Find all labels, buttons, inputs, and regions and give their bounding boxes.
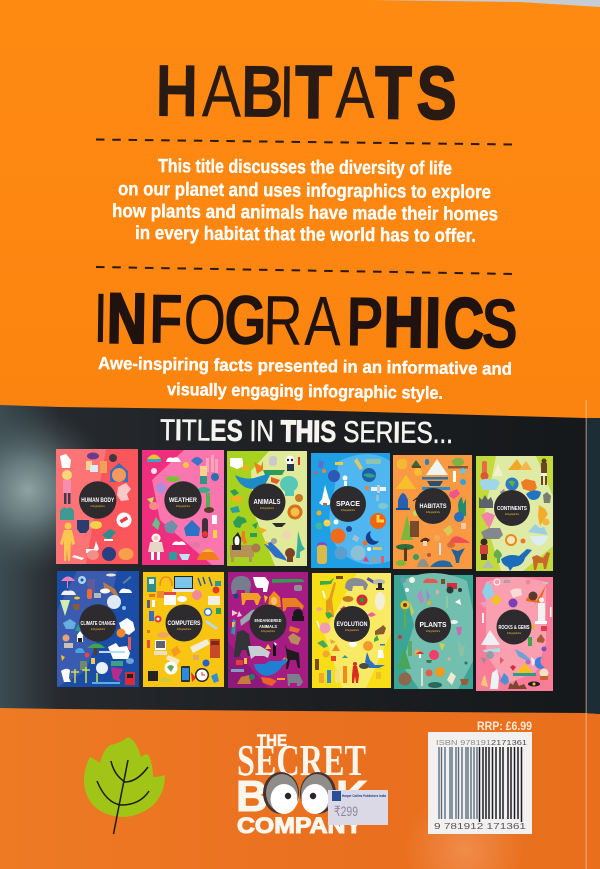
title: Habitats: T (295, 51, 332, 134)
logo: The Secret Book Company: SECRET (237, 736, 366, 785)
text block: description: how plants and animals have made their homes (112, 201, 498, 225)
book cover: Evolution: EVOLUTION (336, 621, 368, 628)
book cover: Endangered Animals: Infographics (261, 629, 276, 633)
title: Infographics: A (304, 282, 342, 361)
panel: upper orange cover (0, 0, 600, 425)
book cover: Weather: Infographics (176, 504, 191, 508)
book cover: Rocks and Gems (476, 577, 553, 691)
book cover: Habitats: Infographics (426, 510, 441, 514)
book cover: Endangered Animals: ENDANGERED (254, 618, 282, 624)
book cover: Computers: Infographics (177, 627, 192, 631)
title: Habitats: A (201, 50, 242, 133)
book cover: Computers: COMPUTERS (168, 620, 201, 627)
title: Infographics: R (263, 282, 303, 360)
title: Habitats: T (375, 52, 412, 135)
book cover: Plants: PLANTS (420, 620, 446, 629)
text block: description: This title discusses the diversity of life (158, 156, 452, 180)
barcode (428, 732, 532, 834)
title: Infographics: P (346, 283, 384, 362)
book cover: Space: SPACE (336, 499, 360, 508)
price sticker: Harper Collins Publishers India (342, 794, 387, 798)
panel: dark series band (0, 400, 600, 869)
book cover: Climate Change (57, 571, 139, 687)
book cover: Habitats: HABITATS (420, 503, 447, 510)
book cover: Plants (394, 573, 473, 689)
book cover: Endangered Animals: ANIMALS (259, 624, 278, 630)
text block: tagline: Awe-inspiring facts presented in an informative and (98, 353, 512, 379)
book cover: Endangered Animals (228, 572, 308, 688)
book cover: Animals: Infographics (260, 506, 275, 510)
icon: green leaf logo (84, 737, 165, 834)
text block: tagline: visually engaging infographic style. (167, 379, 443, 403)
title: Infographics: N (107, 280, 147, 358)
book cover: Computers (143, 572, 224, 687)
book cover: Continents: CONTINENTS (497, 506, 527, 512)
book cover: Evolution: Infographics (345, 628, 360, 632)
title: Infographics: F (149, 280, 183, 359)
title: Infographics: H (384, 284, 424, 362)
text block: description: on our planet and uses infographics to explore (118, 179, 491, 203)
icon: left eye (263, 772, 299, 814)
book cover: Human Body: HUMAN BODY (81, 498, 114, 504)
background corner behind book (370, 0, 600, 7)
logo: The Secret Book Company: K (336, 772, 368, 821)
book cover: Continents (476, 456, 553, 571)
price text: RRP: RRP: £6.99 (477, 721, 532, 733)
book cover: Space: Infographics (341, 508, 356, 512)
price sticker (328, 790, 388, 825)
logo: The Secret Book Company (236, 732, 368, 838)
book cover: Evolution (312, 573, 391, 688)
text block: description: in every habitat that the world has to offer. (135, 223, 476, 247)
title: Habitats (155, 50, 457, 135)
title: Habitats: H (155, 50, 199, 133)
barcode: ISBN 978191 2171361 (436, 738, 527, 747)
price sticker: ₹299 (334, 803, 358, 819)
title: Habitats: B (241, 50, 284, 134)
logo: The Secret Book Company: COMPANY (237, 813, 362, 838)
book cover: Continents: Infographics (505, 512, 520, 516)
logo: The Secret Book Company: B (236, 772, 268, 821)
title: Infographics: O (183, 281, 227, 359)
book cover: Rocks and Gems: ROCKS & GEMS (498, 625, 530, 631)
panel: lower orange cover (0, 700, 600, 869)
title: Infographics: S (481, 285, 519, 363)
title: Habitats: A (335, 51, 376, 134)
book cover: Animals: ANIMALS (254, 499, 281, 506)
book cover: Rocks and Gems: Infographics (507, 631, 522, 635)
book cover: Weather: WEATHER (169, 497, 197, 504)
book cover: Human Body: Infographics (91, 504, 105, 508)
text block: tagline (98, 353, 512, 403)
title: Infographics: I (425, 284, 441, 362)
book cover: Climate Change: CLIMATE CHANGE (80, 621, 116, 627)
icon: right eye (300, 772, 336, 814)
title: Habitats: I (278, 51, 295, 134)
title: Infographics: I (93, 279, 109, 358)
barcode: 9 781912 171361 (434, 822, 527, 831)
book cover: Habitats (393, 455, 472, 569)
text block: description (112, 156, 498, 247)
title: Habitats: S (417, 52, 457, 135)
book cover: Human Body (56, 449, 138, 564)
logo: The Secret Book Company: O (266, 772, 300, 821)
heading: titles in this series: TITLES IN THIS SERIES... (160, 414, 453, 450)
book cover: Plants: Infographics (426, 629, 441, 633)
title: Infographics (93, 279, 519, 363)
logo: The Secret Book Company: THE (257, 732, 287, 750)
title: Infographics: C (444, 284, 484, 363)
title: Infographics: G (224, 281, 267, 360)
book cover: Space (311, 453, 390, 568)
book cover: Animals (227, 451, 307, 566)
logo: The Secret Book Company: O (301, 772, 335, 821)
book cover: Weather (142, 450, 224, 565)
book cover: Climate Change: Infographics (91, 627, 106, 631)
